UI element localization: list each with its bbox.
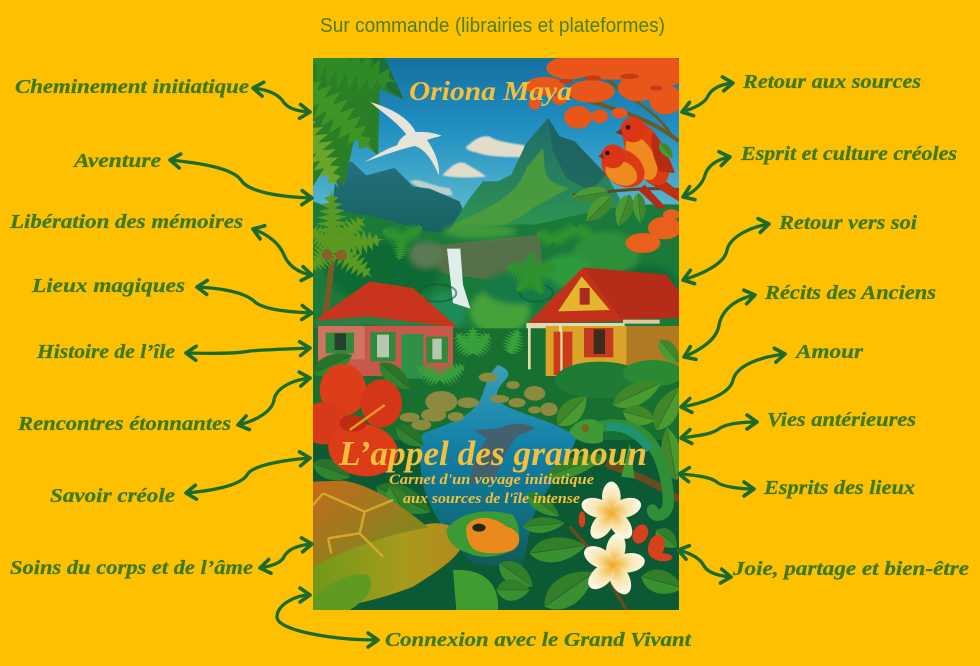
label: Libération des mémoires: Libération des mémoires xyxy=(9,211,243,233)
chameleon xyxy=(569,419,679,515)
left side foliage xyxy=(309,346,436,524)
mid palms xyxy=(377,217,599,301)
arrow: Libération des mémoires xyxy=(253,229,312,275)
arrow: Esprits des lieux xyxy=(679,474,754,489)
heading: availability: Sur commande (librairies et plateformes) xyxy=(320,15,665,37)
arrow: Connexion avec le Grand Vivant xyxy=(277,595,378,640)
arrow: Esprit et culture créoles xyxy=(683,157,730,197)
cover text: author: Oriona Maya xyxy=(409,76,572,106)
label: Cheminement initiatique: Cheminement initiatique xyxy=(15,76,249,98)
arrow: Retour aux sources xyxy=(682,83,733,112)
label: Joie, partage et bien-être: Joie, partage et bien-être xyxy=(732,558,969,580)
label: Récits des Anciens: Récits des Anciens xyxy=(764,282,936,304)
label: Retour vers soi: Retour vers soi xyxy=(778,212,917,234)
cover illustration xyxy=(313,58,679,328)
label: Esprit et culture créoles: Esprit et culture créoles xyxy=(740,143,957,165)
mountains: back range xyxy=(333,162,462,232)
arrow: Rencontres étonnantes xyxy=(238,378,310,425)
label: Soins du corps et de l'âme: Soins du corps et de l’âme xyxy=(10,557,253,579)
right arrows xyxy=(678,83,785,577)
label: Esprits des lieux: Esprits des lieux xyxy=(763,477,915,499)
jungle canopy xyxy=(326,224,680,335)
left house walls xyxy=(318,326,453,379)
label: Histoire de l'île: Histoire de l’île xyxy=(36,341,175,363)
right house walls xyxy=(528,326,679,376)
red buds xyxy=(579,511,672,561)
river xyxy=(420,365,576,570)
arrow: Amour xyxy=(681,354,785,407)
cover lower scene xyxy=(301,324,689,619)
waterfall xyxy=(447,249,470,309)
label: Amour: Amour xyxy=(794,341,863,363)
sky xyxy=(313,58,679,209)
left labels xyxy=(9,76,693,651)
arrow: Aventure xyxy=(170,160,312,198)
arrow: Cheminement initiatique xyxy=(253,88,310,112)
label: Retour aux sources: Retour aux sources xyxy=(742,71,921,93)
shrubs by right house xyxy=(555,360,683,398)
hibiscus flower xyxy=(313,364,402,476)
flamboyant tree xyxy=(525,53,686,141)
label: Vies antérieures: Vies antérieures xyxy=(767,409,916,431)
label: Aventure: Aventure xyxy=(72,150,161,172)
arrow: Histoire de l'île xyxy=(186,348,310,353)
cover text: subtitle line 1: Carnet d'un voyage initiatique xyxy=(389,472,594,488)
birds on branch xyxy=(573,113,679,209)
arrow: Soins du corps et de l'âme xyxy=(260,544,312,568)
arrow: Joie, partage et bien-être xyxy=(678,550,731,577)
clouds xyxy=(410,136,525,195)
turtle xyxy=(313,481,519,610)
left house roof xyxy=(316,281,457,333)
left arrows xyxy=(170,88,378,640)
label: Savoir créole: Savoir créole xyxy=(50,485,175,507)
arrow: Récits des Anciens xyxy=(684,295,755,357)
rocks xyxy=(400,373,558,430)
jungle floor xyxy=(313,328,679,440)
lower leaves xyxy=(381,447,686,619)
panel: book cover xyxy=(313,58,679,610)
right house roof xyxy=(526,267,679,328)
tropicbird xyxy=(365,102,442,175)
top-left palm fronds xyxy=(313,58,404,189)
foreground palm xyxy=(313,190,384,314)
arrow: Lieux magiques xyxy=(197,287,312,313)
arrow: Vies antérieures xyxy=(681,422,757,438)
arrow: Savoir créole xyxy=(186,458,310,493)
mountains: central peak xyxy=(448,118,620,232)
right labels xyxy=(732,71,969,580)
branch leaves xyxy=(571,140,676,229)
cover text: subtitle line 2: aux sources de l'île intense xyxy=(403,491,580,507)
jungle backdrop xyxy=(313,201,679,338)
orange blossom cluster xyxy=(626,209,681,253)
label: Rencontres étonnantes: Rencontres étonnantes xyxy=(17,413,231,435)
dolphin xyxy=(470,424,535,485)
centre ferns xyxy=(417,327,524,386)
cover text: title: L’appel des gramoun xyxy=(338,434,647,473)
cliff xyxy=(434,234,542,280)
label: Connexion avec le Grand Vivant: Connexion avec le Grand Vivant xyxy=(385,629,693,651)
plumeria blossoms xyxy=(570,482,651,610)
arrow: Retour vers soi xyxy=(683,224,769,280)
eyes in the jungle xyxy=(420,284,553,302)
label: Lieux magiques: Lieux magiques xyxy=(31,275,185,297)
right side leaves xyxy=(550,335,689,482)
